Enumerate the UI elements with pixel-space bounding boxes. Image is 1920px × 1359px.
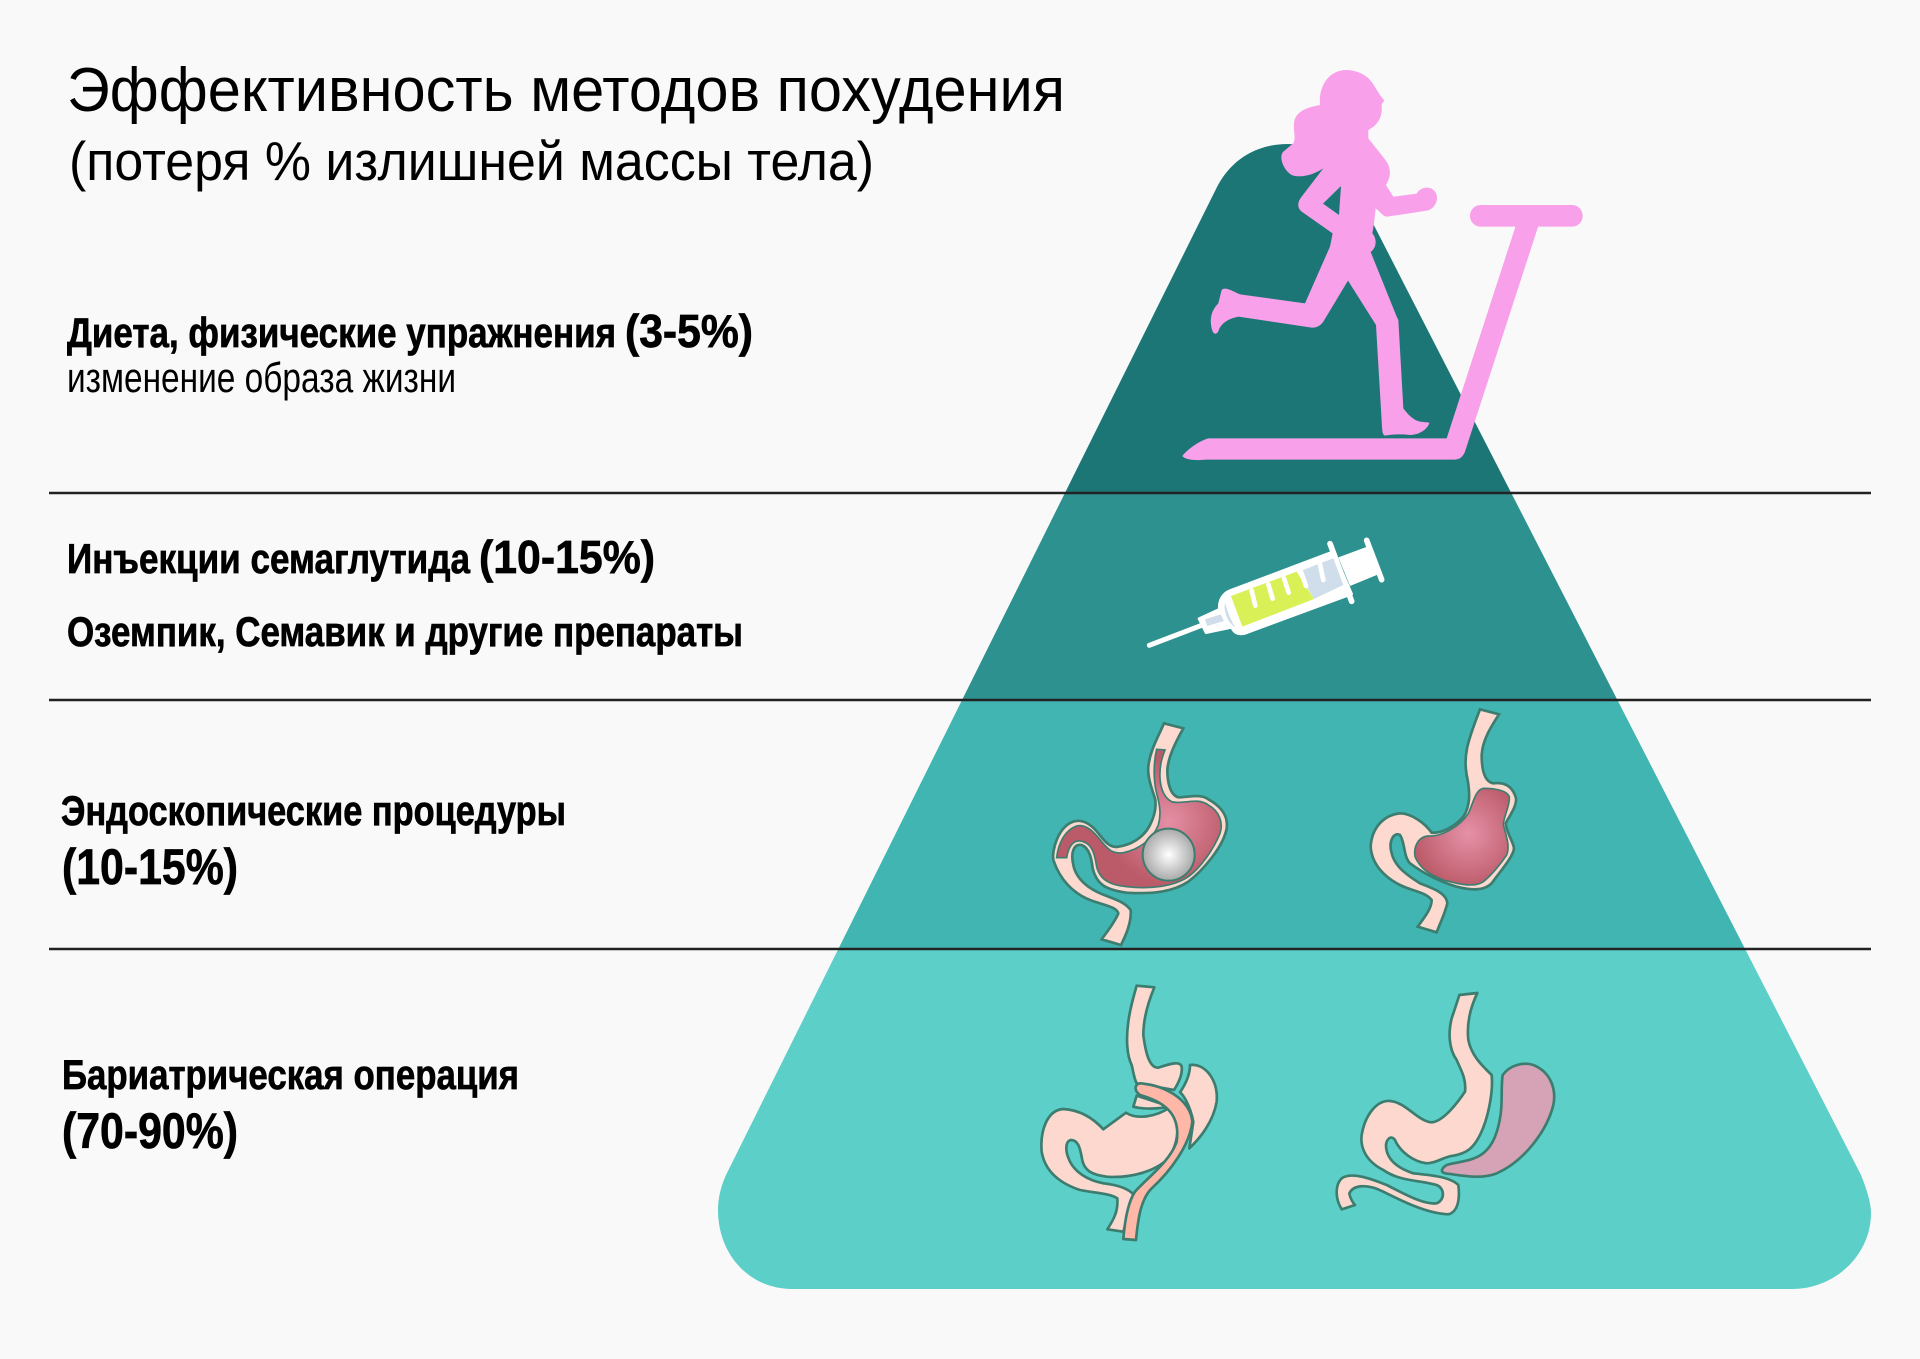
surgery heading: Бариатрическая операция: [62, 1051, 519, 1098]
stomach cavity: [1057, 749, 1221, 888]
treadmill handle: [1470, 205, 1583, 227]
roux limb: [1123, 1083, 1192, 1240]
stomach wall: [1053, 723, 1227, 945]
stomach sleeve and intestine: [1337, 993, 1492, 1214]
treadmill deck and post: [1182, 226, 1538, 460]
pyramid chart: [700, 130, 1900, 1299]
injections description: Оземпик, Семавик и другие препараты: [67, 608, 743, 655]
syringe body: [1199, 552, 1352, 634]
main heading: Эффективность методов похудения: [67, 56, 1065, 125]
injections value: (10-15%): [479, 531, 655, 583]
injections heading: Инъекции семаглутида: [67, 535, 471, 582]
icon: stomach with balloon: [1053, 723, 1227, 945]
diet value: (3-5%): [625, 305, 753, 357]
endoscopy heading: Эндоскопические процедуры: [61, 787, 566, 834]
endoscopy value: (10-15%): [62, 839, 238, 895]
icon: reduced stomach: [1371, 709, 1516, 932]
runner silhouette: [1211, 70, 1437, 436]
stomach wall: [1371, 709, 1516, 932]
remnant stomach top: [1180, 1065, 1217, 1148]
esophagus and pouch: [1127, 986, 1182, 1090]
text block: endoscopy: [61, 787, 566, 895]
icon: runner on treadmill: [1182, 70, 1583, 460]
green liquid: [1231, 572, 1314, 627]
stomach cavity: [1415, 788, 1509, 885]
surgery value: (70-90%): [62, 1103, 238, 1159]
gastric balloon: [1143, 829, 1195, 881]
subtitle: (потеря % излишней массы тела): [69, 130, 874, 192]
needle: [1149, 625, 1202, 645]
icon: gastric bypass: [1041, 986, 1217, 1240]
pyramid tier: surgery: [700, 949, 1900, 1299]
removed stomach part: [1442, 1064, 1554, 1177]
icon: sleeve gastrectomy: [1337, 993, 1554, 1214]
pyramid tier: injections: [962, 494, 1617, 699]
diet heading: Диета, физические упражнения: [67, 309, 616, 356]
icon: syringe: [1149, 540, 1382, 645]
staple fragment: [1133, 1096, 1170, 1109]
text block: surgery: [62, 1051, 519, 1159]
lower stomach and duodenum: [1041, 1107, 1177, 1232]
diet description: изменение образа жизни: [67, 354, 456, 401]
text block: injections: [67, 531, 743, 655]
pyramid tier: diet: [1066, 144, 1511, 492]
plunger: [1338, 547, 1381, 586]
title: [67, 56, 1065, 192]
pyramid tier: endoscopy: [838, 701, 1744, 948]
text block: diet: [67, 305, 753, 401]
empty barrel: [1298, 558, 1343, 599]
